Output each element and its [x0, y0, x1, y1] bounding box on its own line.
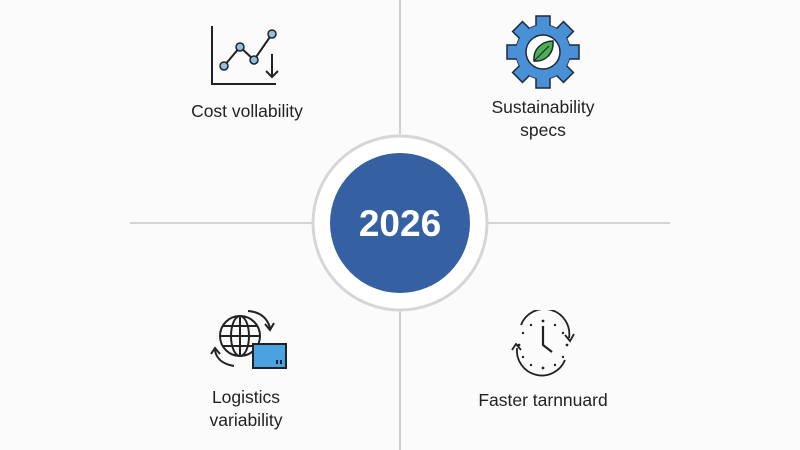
- icon: clock: [511, 310, 575, 376]
- text: faster: Faster tarnnuard: [478, 390, 608, 410]
- text: sustainability: Sustainability: [491, 97, 595, 117]
- text: sustainability: [491, 97, 595, 140]
- text: logistics: Logistics: [212, 387, 280, 407]
- center circle: [312, 134, 488, 312]
- text: sustainability: specs: [520, 120, 566, 140]
- text: logistics: variability: [210, 410, 282, 430]
- icon: gear leaf: [506, 15, 580, 89]
- text: logistics: [210, 387, 282, 430]
- text: cost: Cost vollability: [191, 101, 303, 121]
- icon: globe logistics: [210, 310, 287, 369]
- icon: line chart: [211, 26, 279, 85]
- year label: 2026: [359, 203, 441, 244]
